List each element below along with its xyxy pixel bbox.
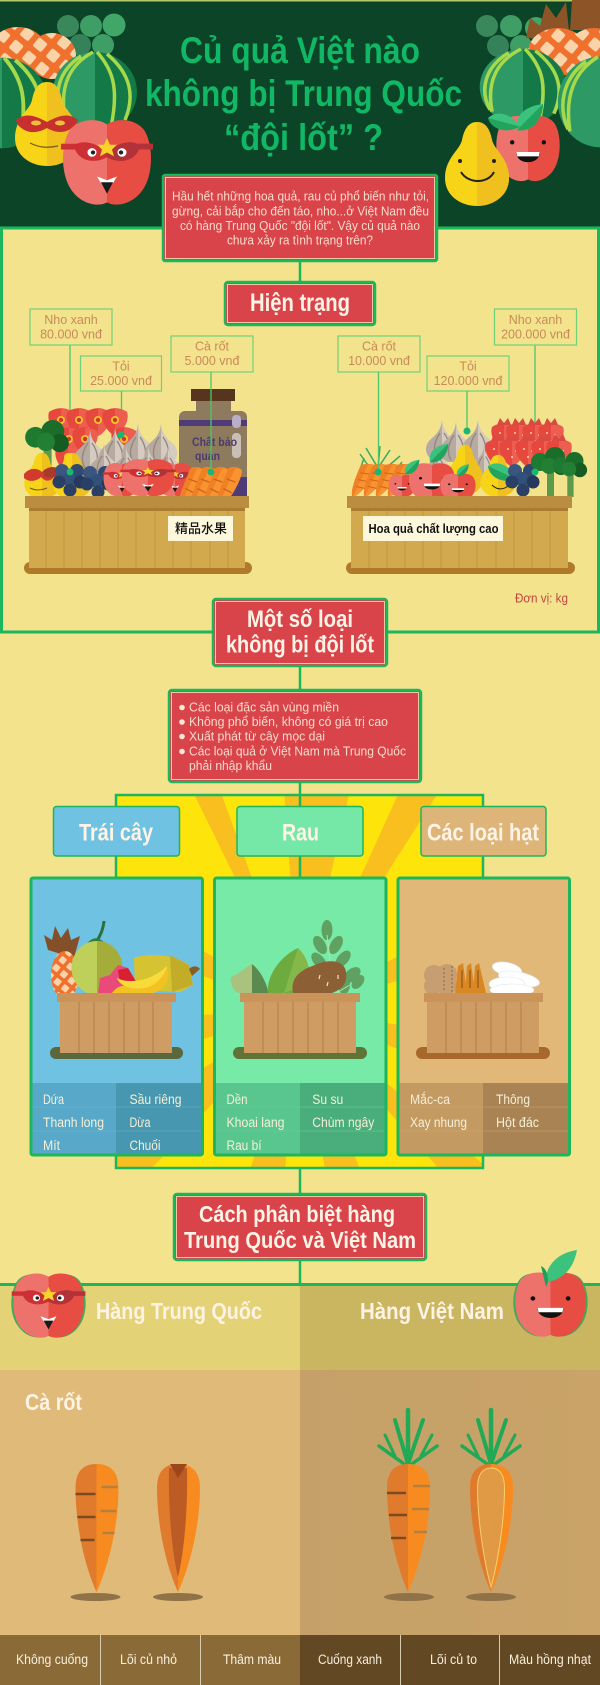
carrot: Vietnamese whole [379,1410,437,1601]
criteria box: Các loại đặc sản vùng miền [189,700,339,714]
category: Trái cây [54,806,180,856]
heading: Một số loại không bị đội lốt: Một số loại [247,606,353,633]
unit note: Đơn vị: kg [515,590,568,606]
price label: Tỏi 120.000: 120.000 vnđ [434,374,502,388]
criteria box: Xuất phát từ cây mọc dại [189,728,325,744]
title [145,30,462,158]
price label: Cà rốt 5.000: Cà rốt [195,340,230,354]
carrot: Chinese cut [153,1464,203,1601]
heading: Hiện trạng [225,282,375,325]
table: Rau bí [226,1138,262,1153]
strawberries [485,418,572,467]
table: Su su [312,1092,343,1107]
fruit illustration [44,921,200,999]
crate [346,496,575,574]
table [214,1083,386,1155]
apples [389,444,476,500]
criteria box [169,690,421,782]
category: Trái cây: Trái cây [79,820,154,846]
crate label: Hoa quả chất lượng cao [368,522,499,536]
table: Khoai lang [226,1115,284,1130]
heading: Một số loại không bị đội lốt: không bị đội lốt [226,632,374,658]
price label: Nho xanh 80.000 [30,309,112,345]
illustration: left fruit group [0,14,153,205]
table: Chuối [130,1138,160,1153]
broccoli [531,447,587,497]
pears [447,445,516,497]
price label: Cà rốt 10.000 [338,336,420,372]
masked apples [103,459,194,496]
crate [24,496,252,574]
garlic pile [425,420,497,482]
icon: smiling apple [513,1250,588,1337]
crate [50,993,183,1059]
heading: Một số loại không bị đội lốt [213,599,387,666]
crate label: 精品水果 [175,521,227,536]
heading: Cách phân biệt hàng Trung Quốc và Việt Nam [174,1194,426,1260]
grapes [506,464,540,496]
connector tree [116,666,483,1285]
table: Xay nhung [410,1115,467,1130]
title: không bị Trung Quốc [145,73,462,114]
price label: Cà rốt 10.000: Cà rốt [362,340,397,354]
table: Thông [496,1092,530,1107]
intro text box: chưa xảy ra tình trạng trên? [227,232,373,248]
price label: Tỏi 25.000: Tỏi [112,360,130,374]
panel: nuts [398,878,570,1155]
criteria box: Các loại quả ở Việt Nam mà Trung Quốc [189,744,406,758]
comparison caption bar: Thâm màu [223,1652,281,1667]
table: Hột đác [496,1115,539,1130]
crate label [363,516,503,541]
intro text box: gừng, cải bắp cho đến táo, nho...ở Việt Nam đều [172,204,429,218]
price label: Nho xanh 80.000: Nho xanh [44,313,98,327]
price label: Nho xanh 200.000: 200.000 vnđ [501,328,570,342]
carrots with tops [352,446,412,497]
connector: intro to heading [299,262,301,281]
header band [0,0,600,228]
comparison caption bar [0,1635,600,1685]
panel: fruits [31,878,202,1155]
masked pears [24,453,91,499]
table: Mít [43,1138,60,1153]
title: “đội lốt” ? [224,117,383,158]
comparison caption bar: Lõi củ to [430,1652,477,1667]
illustration: Vietnamese produce crate [346,372,587,574]
crate [233,993,367,1059]
intro text box [163,175,437,261]
carrot: Vietnamese cut [462,1410,520,1601]
grapes [52,464,86,496]
title: Củ quả Việt nào [180,30,420,71]
comparison caption bar: Cuống xanh [318,1652,382,1667]
price label: Nho xanh 80.000: 80.000 vnđ [40,328,102,342]
criteria box: Không phổ biến, không có giá trị cao [189,714,388,729]
illustration: Chinese produce crate [24,372,252,574]
criteria box: phải nhập khẩu [189,758,272,773]
price label: Tỏi 120.000 [427,356,509,391]
table: Sầu riêng [130,1092,182,1107]
garlic pile [74,424,182,482]
illustration: right fruit group [445,0,600,206]
price label: Nho xanh 200.000 [494,309,576,345]
sunburst background [117,796,482,1167]
small carrots [176,465,247,517]
category: Các loại hạt: Các loại hạt [427,820,539,846]
price label: Cà rốt 5.000 [171,336,253,372]
table: Dền [226,1092,248,1107]
price label: Tỏi 25.000 [80,356,162,391]
table: Chùm ngây [312,1115,375,1130]
category: Các loại hạt [421,806,546,856]
heading: Cách phân biệt hàng Trung Quốc và Việt Nam: Cách phân biệt hàng [199,1201,395,1227]
preservative bottle: quản [195,451,220,463]
price label: Tỏi 120.000: Tỏi [459,360,477,374]
vegetable illustration [231,920,367,994]
table: Mắc-ca [410,1092,450,1107]
category: Rau [237,806,363,856]
panel: vegetables [214,878,386,1155]
price label: Nho xanh 200.000: Nho xanh [509,313,562,327]
crate [416,993,550,1059]
crate label [168,516,233,541]
broccoli [25,420,69,478]
table [31,1083,202,1155]
category: Rau: Rau [282,820,319,846]
label: Hàng Việt Nam: Hàng Việt Nam [360,1298,504,1324]
carrot: Chinese whole [70,1464,120,1601]
preservative bottle [179,389,247,496]
strawberries [48,408,137,473]
comparison caption bar: Lõi củ nhỏ [120,1652,177,1667]
table: Thanh long [43,1115,104,1130]
price label: Tỏi 25.000: 25.000 vnđ [90,374,152,388]
icon: masked apple [11,1273,86,1338]
price label: Cà rốt 10.000: 10.000 vnđ [348,354,410,368]
carrot comparison area [0,1370,600,1635]
table: Dừa [130,1115,151,1130]
comparison header [0,1250,600,1370]
comparison caption bar: Không cuống [16,1652,88,1667]
price pointer line and dots [66,372,214,476]
intro text box: Hầu hết những hoa quả, rau củ phổ biến như tỏi, [172,188,429,204]
table: Dứa [43,1092,64,1107]
heading: Hiện trạng: Hiện trạng [250,289,350,317]
preservative bottle: Chất bảo [192,437,237,449]
label: Hàng Trung Quốc: Hàng Trung Quốc [96,1298,262,1324]
price connector lines [70,345,535,472]
panel: current situation frame [2,228,598,632]
comparison caption bar: Màu hồng nhạt [509,1652,591,1667]
intro text box: có hàng Trung Quốc "đội lốt". Vậy củ quả nào [180,218,420,233]
price pointer lines and dots [374,372,538,476]
table [398,1083,570,1155]
price label: Cà rốt 5.000: 5.000 vnđ [185,354,239,368]
heading: Cách phân biệt hàng Trung Quốc và Việt Nam: Trung Quốc và Việt Nam [184,1227,416,1253]
label: Cà rốt: Cà rốt [25,1389,82,1415]
nuts illustration [424,960,541,996]
